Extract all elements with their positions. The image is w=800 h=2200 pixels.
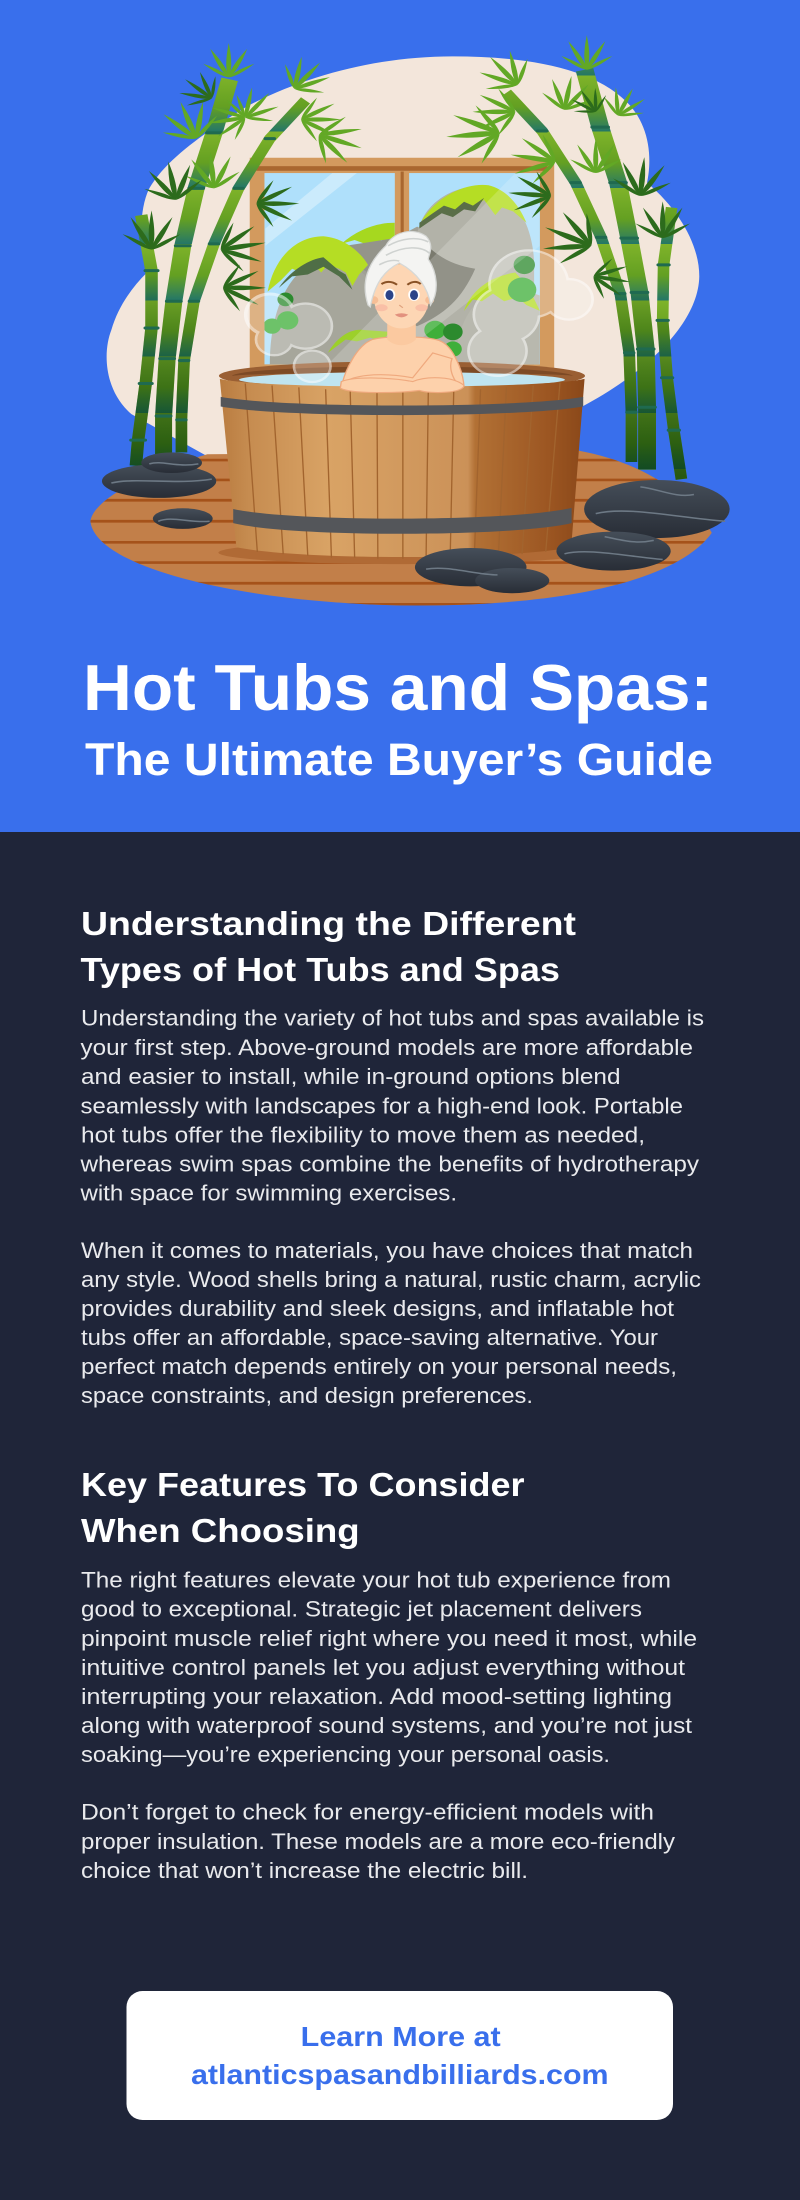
- cream background blob: [107, 56, 699, 456]
- torso: [341, 337, 464, 389]
- text block: energy efficiency: choice that won’t increase the electric bill.: [81, 1858, 528, 1883]
- text block: energy efficiency: [81, 1800, 675, 1883]
- text block: materials: perfect match depends entirely on your personal needs,: [81, 1354, 677, 1379]
- call to action button: Learn More at: [301, 2021, 501, 2052]
- heading: understanding types: Understanding the Different: [81, 905, 576, 942]
- text block: features: intuitive control panels let you adjust everything without: [81, 1655, 685, 1680]
- text block: features: [81, 1568, 697, 1767]
- bamboo stalks left: [136, 79, 306, 466]
- text block: tub types: Understanding the variety of hot tubs and spas available is: [81, 1006, 704, 1031]
- face: [374, 264, 429, 328]
- steam clouds: [244, 249, 594, 383]
- rocks and moss outside the window: [263, 173, 540, 364]
- towel: [365, 231, 436, 307]
- wooden deck floor: [87, 450, 730, 605]
- text block: materials: [81, 1238, 701, 1408]
- woman: [341, 231, 464, 392]
- text block: tub types: seamlessly with landscapes for a high-end look. Portable: [80, 1093, 683, 1118]
- black river stones: [102, 452, 730, 593]
- text block: features: soaking—you’re experiencing your personal oasis.: [81, 1742, 610, 1767]
- text block: features: interrupting your relaxation. Add mood-setting lighting: [81, 1684, 672, 1709]
- text block: materials: When it comes to materials, you have choices that match: [81, 1238, 693, 1263]
- tub outer rim: [219, 361, 585, 390]
- bamboo leaves light: [152, 35, 654, 192]
- text block: materials: tubs offer an affordable, space-saving alternative. Your: [81, 1325, 658, 1350]
- text block: energy efficiency: proper insulation. These models are a more eco-friendly: [81, 1829, 675, 1854]
- text block: features: pinpoint muscle relief right where you need it most, while: [81, 1626, 697, 1651]
- call to action button: atlanticspasandbilliards.com: [191, 2059, 609, 2090]
- illustration: woman in a wooden hot tub: [87, 35, 730, 605]
- stave lines: [245, 383, 560, 559]
- text block: tub types: whereas swim spas combine the benefits of hydrotherapy: [79, 1152, 699, 1177]
- metal band upper: [221, 397, 583, 415]
- heading: understanding types: [80, 905, 576, 988]
- heading: key features: When Choosing: [81, 1512, 360, 1549]
- text block: tub types: with space for swimming exercises.: [79, 1180, 457, 1205]
- panel: article body: [0, 832, 800, 2200]
- woman's forearms on the rim: [340, 378, 464, 393]
- bamboo leaves dark: [121, 64, 691, 312]
- title: The Ultimate Buyer’s Guide: [85, 734, 713, 785]
- text block: tub types: hot tubs offer the flexibility to move them as needed,: [81, 1122, 645, 1147]
- text block: tub types: your first step. Above-ground models are more affordable: [80, 1035, 693, 1060]
- window: [250, 158, 554, 372]
- text block: features: good to exceptional. Strategic jet placement delivers: [81, 1597, 642, 1622]
- panel: header: [0, 0, 800, 832]
- folded arms: [341, 353, 464, 392]
- facial features: [375, 282, 428, 317]
- text block: features: along with waterproof sound systems, and you’re not just: [81, 1713, 692, 1738]
- glass reflections: [265, 173, 357, 246]
- text block: materials: space constraints, and design preferences.: [81, 1383, 533, 1408]
- bamboo node rings: [131, 127, 679, 440]
- water: [239, 372, 565, 387]
- text block: tub types: and easier to install, while in-ground options blend: [81, 1064, 620, 1089]
- heading: key features: Key Features To Consider: [81, 1466, 525, 1503]
- text block: energy efficiency: Don’t forget to check for energy-efficient models with: [81, 1800, 654, 1825]
- towel folds: [379, 239, 430, 265]
- text block: materials: provides durability and sleek designs, and inflatable hot: [81, 1296, 674, 1321]
- heading: key features: [81, 1466, 525, 1549]
- neck: [387, 318, 416, 345]
- tub body with staves: [220, 379, 585, 557]
- title: Hot Tubs and Spas:: [83, 651, 713, 724]
- text block: features: The right features elevate your hot tub experience from: [81, 1568, 671, 1593]
- metal band lower: [233, 508, 572, 534]
- heading: understanding types: Types of Hot Tubs and Spas: [80, 951, 560, 988]
- text block: materials: any style. Wood shells bring a natural, rustic charm, acrylic: [81, 1267, 701, 1292]
- bamboo stalks right: [506, 70, 681, 479]
- call to action button: [126, 1991, 673, 2120]
- hot tub: [219, 231, 585, 559]
- title: [83, 651, 713, 785]
- text block: tub types: [79, 1006, 704, 1205]
